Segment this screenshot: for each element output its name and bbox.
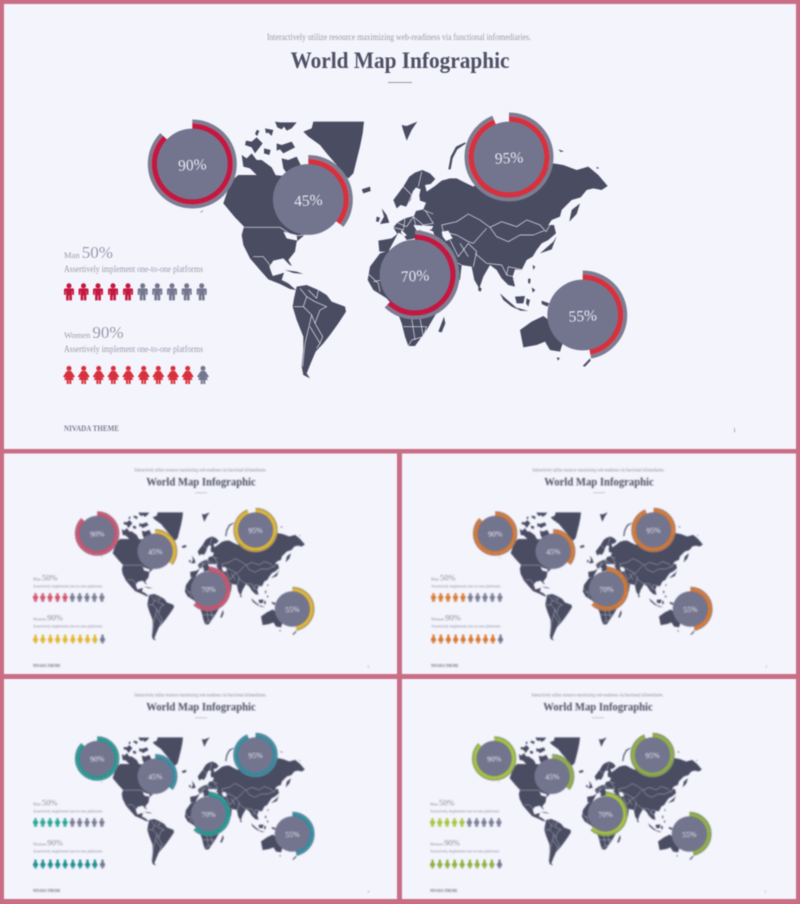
footer brand: NIVADA THEME — [64, 424, 119, 433]
ring 95% — [234, 509, 277, 551]
ring 70%: 70% — [400, 267, 430, 286]
ring 55%: 55% — [682, 830, 697, 839]
title: World Map Infographic — [146, 476, 256, 488]
title: World Map Infographic — [290, 48, 510, 73]
stat: man: Man 50% — [33, 798, 57, 808]
women description: Assertively implement one-to-one platforms — [430, 848, 500, 854]
ring 55% — [669, 588, 712, 630]
man description: Assertively implement one-to-one platforms — [33, 808, 103, 814]
ring 45% — [532, 530, 574, 572]
ring 90% — [473, 737, 515, 780]
ring 95%: 95% — [646, 526, 661, 535]
pictogram row: women — [33, 634, 105, 644]
ring 70% — [584, 793, 627, 835]
ring 95%: 95% — [494, 149, 524, 168]
ring 70%: 70% — [599, 585, 614, 594]
ring 55%: 55% — [285, 605, 300, 614]
man description: Assertively implement one-to-one platforms — [33, 584, 103, 588]
page number: 1 — [733, 428, 736, 434]
panel: red and yellow slide — [4, 454, 397, 674]
stat: women: Women 90% — [64, 323, 124, 342]
ring 95%: 95% — [248, 751, 263, 760]
pictogram row: men — [430, 818, 501, 827]
ring 95% — [632, 509, 675, 551]
world map — [101, 512, 305, 641]
subtitle: Interactively utilize resource maximizing web-readiness via functional infomediaries. — [134, 694, 266, 698]
man description: Assertively implement one-to-one platforms — [64, 264, 203, 274]
ring 90%: 90% — [90, 529, 105, 539]
world map — [200, 122, 608, 378]
stat: women: Women 90% — [33, 612, 63, 622]
stat: women: Women 90% — [431, 612, 461, 622]
title rule — [195, 716, 207, 719]
panel: teal slide — [4, 679, 397, 899]
ring 90% — [150, 122, 235, 206]
women description: Assertively implement one-to-one platforms — [33, 848, 103, 854]
pictogram row: women — [33, 859, 105, 868]
page number: 4 — [368, 890, 370, 894]
footer brand: NIVADA THEME — [33, 663, 61, 668]
slide content — [33, 694, 370, 894]
pictogram row: men — [431, 593, 502, 602]
ring 45%: 45% — [148, 772, 163, 782]
subtitle: Interactively utilize resource maximizing web-readiness via functional infomediaries. — [267, 32, 531, 43]
man description: Assertively implement one-to-one platforms — [430, 808, 500, 814]
ring 95%: 95% — [645, 751, 660, 760]
stat: man: Man 50% — [64, 243, 113, 262]
ring 95% — [234, 734, 277, 776]
ring 70%: 70% — [201, 585, 216, 594]
pictogram row: women — [63, 366, 209, 384]
ring 45% — [266, 157, 351, 242]
slide content — [430, 694, 766, 894]
women description: Assertively implement one-to-one platforms — [33, 624, 103, 628]
page number: 3 — [766, 664, 768, 668]
ring 70% — [372, 232, 458, 318]
ring 45% — [134, 530, 176, 572]
ring 90% — [76, 512, 118, 555]
pictogram row: men — [64, 283, 207, 300]
footer brand: NIVADA THEME — [33, 888, 61, 893]
ring 90%: 90% — [178, 156, 207, 175]
ring 70% — [187, 793, 230, 835]
ring 45%: 45% — [148, 547, 163, 557]
slide content — [431, 468, 768, 668]
ring 95%: 95% — [248, 526, 263, 535]
ring 55% — [540, 272, 625, 358]
ring 55% — [271, 588, 314, 630]
slide content — [33, 468, 370, 668]
ring 90% — [474, 512, 516, 555]
ring 70%: 70% — [201, 810, 216, 819]
world map — [101, 737, 305, 866]
ring 70%: 70% — [598, 810, 613, 819]
ring 45% — [134, 755, 176, 798]
title rule — [593, 492, 605, 494]
stat: women: Women 90% — [430, 838, 460, 848]
page number: 2 — [368, 664, 370, 668]
women description: Assertively implement one-to-one platforms — [64, 344, 203, 354]
title: World Map Infographic — [543, 702, 653, 714]
subtitle: Interactively utilize resource maximizing web-readiness via functional infomediaries. — [134, 468, 266, 474]
pictogram row: women — [431, 634, 503, 644]
ring 55% — [668, 813, 711, 855]
ring 90%: 90% — [488, 529, 503, 539]
pictogram row: men — [33, 593, 104, 602]
page number: 5 — [764, 890, 766, 894]
pictogram row: men — [33, 818, 104, 827]
ring 55%: 55% — [285, 830, 300, 839]
subtitle: Interactively utilize resource maximizing web-readiness via functional infomediaries. — [532, 468, 664, 474]
ring 55% — [271, 813, 314, 855]
ring 70% — [187, 568, 230, 610]
footer brand: NIVADA THEME — [431, 663, 459, 668]
ring 45%: 45% — [546, 547, 561, 557]
title rule — [592, 716, 604, 719]
ring 95% — [631, 734, 674, 776]
stat: man: Man 50% — [431, 572, 455, 582]
ring 45%: 45% — [545, 772, 560, 782]
footer brand: NIVADA THEME — [430, 888, 458, 893]
man description: Assertively implement one-to-one platforms — [431, 584, 501, 588]
panel: green slide — [402, 679, 796, 899]
ring 55%: 55% — [568, 307, 597, 326]
pictogram row: women — [430, 859, 502, 868]
ring 95% — [466, 114, 552, 200]
ring 45% — [531, 755, 573, 798]
ring 90%: 90% — [90, 754, 105, 764]
stat: man: Man 50% — [33, 572, 57, 582]
panel: orange slide — [402, 454, 796, 674]
ring 45%: 45% — [294, 192, 323, 210]
title: World Map Infographic — [146, 702, 256, 714]
ring 90% — [76, 737, 118, 780]
stat: man: Man 50% — [430, 798, 454, 808]
title: World Map Infographic — [544, 476, 654, 488]
ring 55%: 55% — [683, 605, 698, 614]
women description: Assertively implement one-to-one platforms — [431, 624, 501, 628]
ring 90%: 90% — [487, 754, 502, 764]
title rule — [195, 492, 207, 494]
title rule — [388, 82, 412, 83]
world map — [498, 737, 702, 866]
ring 70% — [585, 568, 628, 610]
subtitle: Interactively utilize resource maximizing web-readiness via functional infomediaries. — [532, 694, 664, 698]
stat: women: Women 90% — [33, 838, 63, 848]
world map — [499, 512, 703, 641]
panel: large slide — [4, 4, 796, 449]
